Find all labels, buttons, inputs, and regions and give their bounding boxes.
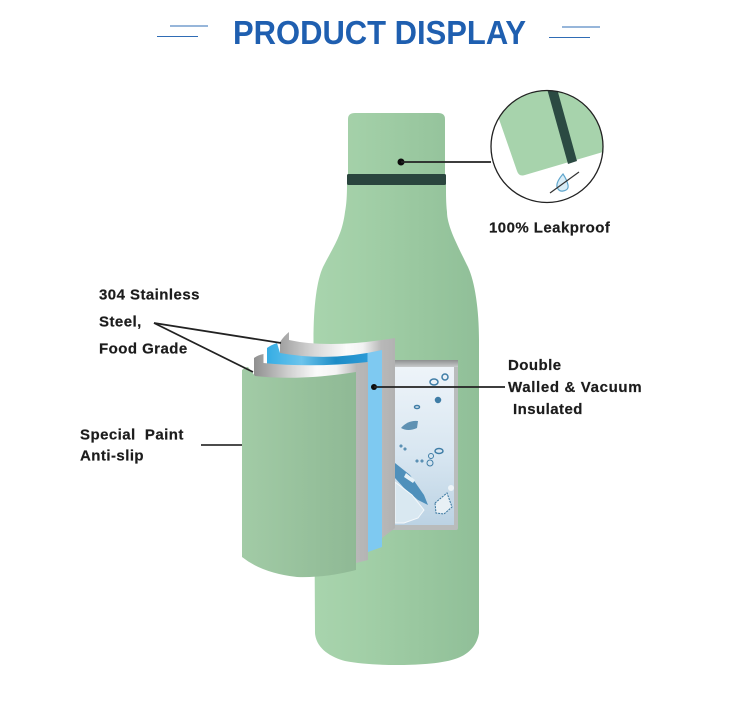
bottle cap bbox=[348, 113, 445, 176]
label: double walled: Insulated bbox=[513, 401, 583, 418]
bottle seal band bbox=[347, 174, 446, 185]
ice and bubbles bbox=[400, 374, 448, 466]
label: stainless steel: 304 Stainless bbox=[99, 286, 200, 304]
label: stainless steel: Steel, bbox=[99, 314, 142, 330]
layer: outer steel bbox=[280, 332, 395, 538]
label: double walled: Double bbox=[508, 357, 562, 374]
layer: inner steel bbox=[254, 354, 368, 563]
icon: crossed water drop bbox=[550, 172, 579, 193]
label: special paint: Special Paint bbox=[80, 426, 184, 444]
label: special paint: Anti-slip bbox=[80, 448, 144, 464]
magnifier: leakproof detail bbox=[490, 90, 604, 204]
water window bbox=[390, 360, 458, 530]
label: leakproof: 100% Leakproof bbox=[489, 220, 611, 236]
label: double walled: Walled & Vacuum bbox=[508, 379, 642, 396]
label: double walled bbox=[508, 357, 642, 418]
decorative lines: left of title bbox=[157, 26, 208, 36]
leader line: special paint bbox=[201, 444, 242, 446]
bottle body bbox=[314, 184, 479, 665]
layer: blue insulation bbox=[267, 343, 382, 552]
label: special paint bbox=[80, 426, 184, 464]
bottle bbox=[314, 113, 479, 665]
leader lines: stainless steel bbox=[154, 323, 281, 372]
title: PRODUCT DISPLAY bbox=[233, 14, 526, 51]
label: stainless steel: Food Grade bbox=[99, 340, 188, 358]
leader: double walled bbox=[371, 384, 505, 390]
decorative lines: right of title bbox=[549, 27, 600, 38]
label: stainless steel bbox=[99, 286, 200, 358]
layer: green paint wrap bbox=[242, 367, 356, 577]
leader: seal band dot to lens bbox=[398, 158, 491, 166]
